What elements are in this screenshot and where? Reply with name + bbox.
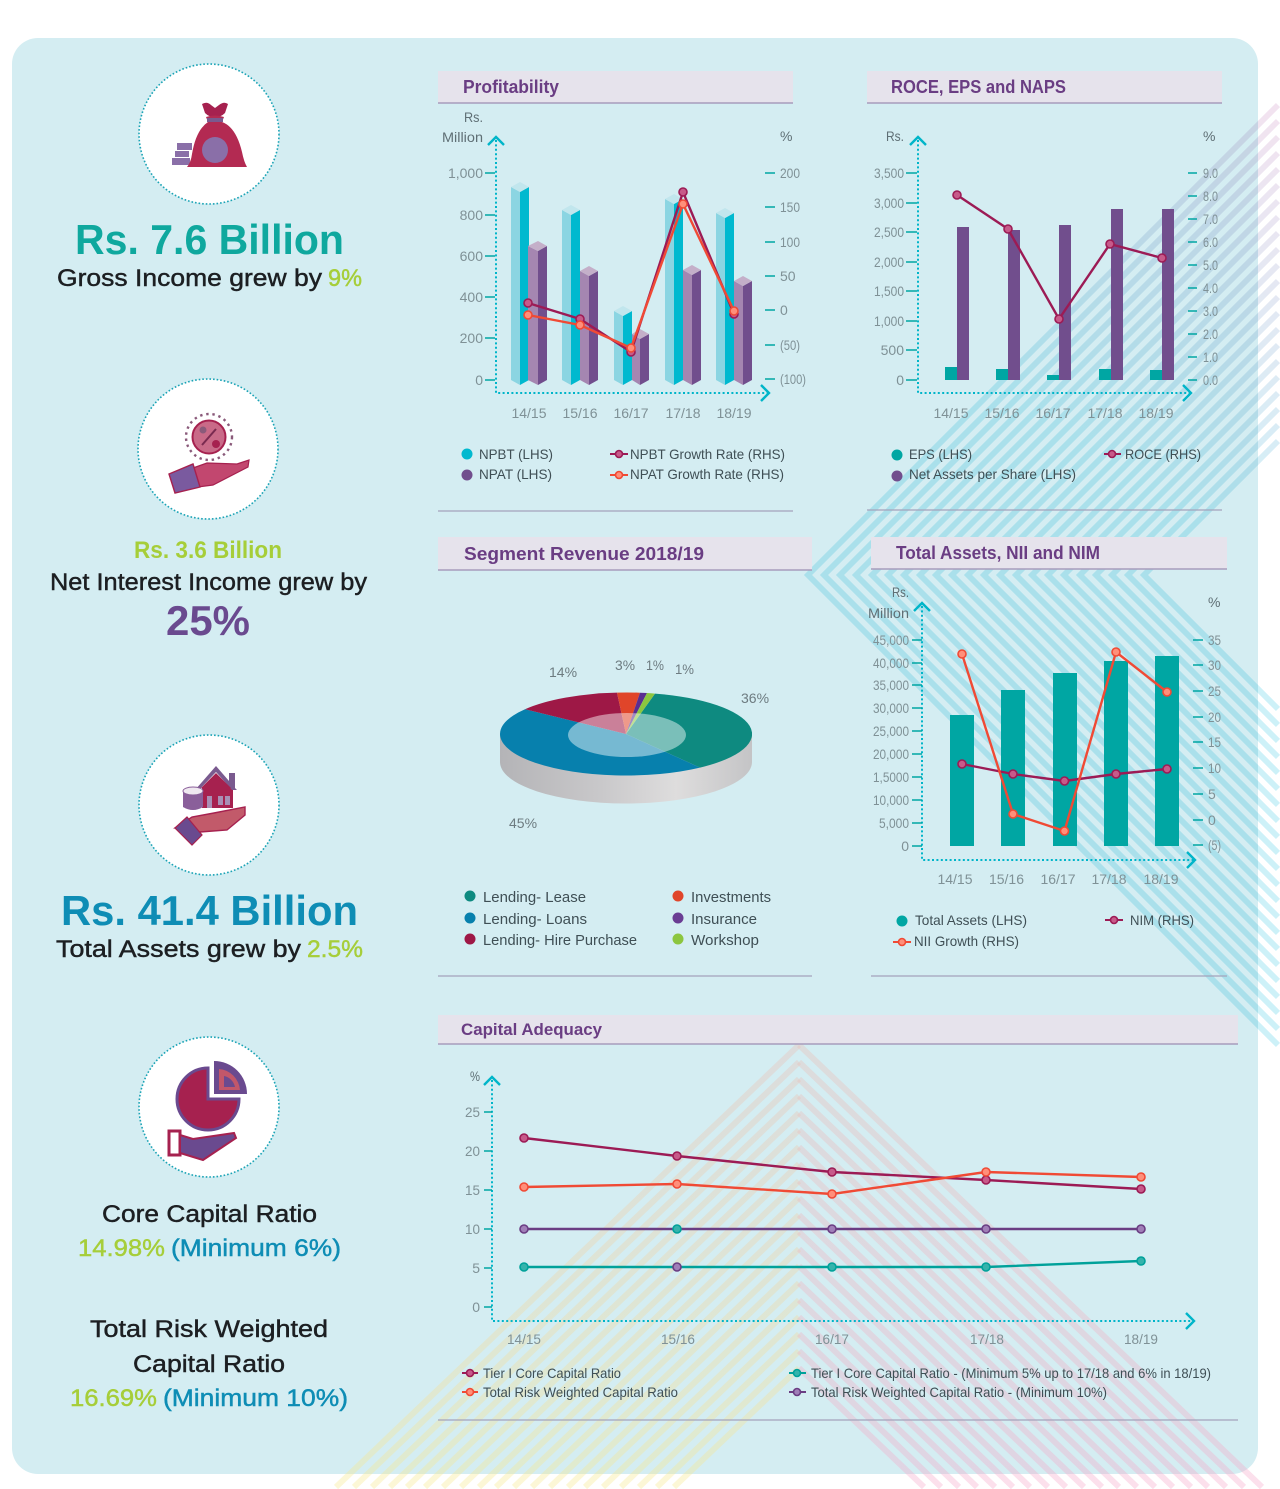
combo chart: 30 [1208,657,1221,673]
line chart: 5 [472,1260,480,1276]
bar chart: EPS and net assets per share: 17/18 [1087,405,1123,421]
legend: Insurance [691,911,757,928]
legend: ROCE (RHS) [1125,446,1201,462]
combo chart: 25 [1208,683,1221,699]
bar chart: EPS and net assets per share: 4.0 [1203,280,1218,296]
bar chart: NPBT and NPAT: (100) [780,371,806,387]
heading [438,71,793,103]
bar chart: NPBT and NPAT: 17/18 [665,405,701,421]
legend [462,446,785,482]
bar chart: NPBT and NPAT: % [780,128,792,144]
heading [867,71,1222,103]
bar chart: EPS and net assets per share: 9.0 [1203,165,1218,181]
combo chart: 0 [1208,812,1216,828]
panel: total assets, NII and NIM [868,537,1227,976]
combo chart: 40,000 [873,655,909,671]
total risk weighted capital ratio: 16.69% [70,1385,157,1412]
bar chart: EPS and net assets per share: 0 [896,372,904,388]
bar chart: EPS and net assets per share: 1.0 [1203,349,1218,365]
bar chart: EPS and net assets per share: 7.0 [1203,211,1218,227]
NII growth line [958,648,1171,835]
pie percentage labels [509,657,769,831]
panel: net interest income highlight [50,379,367,644]
bar chart: EPS and net assets per share: 1,500 [874,283,904,299]
combo chart: 5 [1208,786,1216,802]
legend: NII Growth (RHS) [914,933,1019,949]
pie percentage labels: 14% [549,664,577,680]
legend: Lending- Loans [483,911,587,928]
line chart: 20 [465,1143,480,1159]
legend: Lending- Hire Purchase [483,932,637,949]
heading: Segment Revenue 2018/19 [464,544,704,564]
pie percentage labels: 3% [615,657,635,673]
legend: Workshop [691,932,759,949]
bar chart: NPBT and NPAT: 18/19 [716,405,752,421]
bar chart: EPS and net assets per share: 14/15 [933,405,969,421]
combo chart: 15/16 [989,871,1024,887]
bar chart: EPS and net assets per share: 2.0 [1203,326,1218,342]
tier I core capital ratio line [520,1134,1145,1193]
combo chart: 35,000 [873,677,909,693]
minimum total risk weighted ratio line [520,1225,1145,1233]
pie percentage labels: 45% [509,815,537,831]
line chart: 25 [465,1104,480,1120]
bar chart: NPBT and NPAT: Million [442,129,483,145]
combo chart: 0 [901,838,909,854]
bar chart: EPS and net assets per share: 16/17 [1035,405,1071,421]
bar chart: EPS and net assets per share: 15/16 [984,405,1020,421]
line chart: 15/16 [661,1331,695,1347]
heading: Capital Adequacy [461,1020,603,1039]
pie percentage labels: 1% [675,661,694,677]
total risk weighted capital ratio: Capital Ratio [133,1351,285,1378]
combo chart: 35 [1208,632,1221,648]
bar chart: NPBT and NPAT: 800 [460,207,483,223]
total risk weighted capital ratio [70,1316,348,1412]
bar chart: EPS and net assets per share: 1,000 [874,313,904,329]
legend [893,912,1194,949]
pie percentage labels: 1% [646,657,664,673]
heading: Total Assets, NII and NIM [896,543,1100,563]
combo chart: 10,000 [873,792,909,808]
ROCE line [953,191,1166,323]
EPS bars [945,367,1162,380]
line chart [465,1068,1194,1347]
line chart: 15 [465,1182,480,1198]
bar chart: EPS and net assets per share: 5.0 [1203,257,1218,273]
legend [892,446,1201,482]
legend: NIM (RHS) [1130,912,1194,928]
bar chart: NPBT and NPAT: 100 [780,234,800,250]
combo chart: 15 [1208,734,1221,750]
bar chart: EPS and net assets per share: 3.0 [1203,303,1218,319]
core capital ratio [78,1201,341,1262]
legend: NPBT Growth Rate (RHS) [630,446,785,462]
pie percentage labels: 36% [741,690,769,706]
heading [438,537,812,570]
total risk weighted capital ratio: (Minimum 10%) [163,1385,348,1412]
NIM line [958,760,1171,785]
heading [871,537,1227,569]
panel: total assets highlight [56,735,363,963]
bar chart: EPS and net assets per share: % [1203,128,1215,144]
stat percentage: 25% [166,597,250,644]
bar chart: NPBT and NPAT: (50) [780,337,800,353]
combo chart: 16/17 [1040,871,1076,887]
combo chart: 20 [1208,709,1221,725]
line chart: 14/15 [507,1331,541,1347]
heading: Profitability [463,77,559,97]
combo chart: Million [868,605,909,621]
bar chart: EPS and net assets per share: 8.0 [1203,188,1218,204]
legend: NPBT (LHS) [479,446,553,462]
bar chart: EPS and net assets per share: 2,500 [874,224,904,240]
bar chart: EPS and net assets per share: 500 [881,342,904,358]
bar chart: NPBT and NPAT: 1,000 [448,165,483,181]
legend: Tier I Core Capital Ratio [483,1365,621,1381]
bar chart: EPS and net assets per share [874,128,1218,421]
bar chart: NPBT and NPAT: 0 [475,372,483,388]
bar chart: EPS and net assets per share: Rs. [886,128,904,144]
legend: EPS (LHS) [909,446,972,462]
icon: money bag [139,64,279,204]
heading [438,1015,1238,1044]
combo chart: (5) [1208,837,1221,853]
combo chart: 18/19 [1143,871,1179,887]
bar chart: NPBT and NPAT: 14/15 [511,405,547,421]
stat caption: 2.5% [307,936,363,963]
bar chart: NPBT and NPAT: 600 [460,248,483,264]
minimum tier I ratio line [520,1257,1145,1271]
legend: Investments [691,889,771,906]
legend: NPAT Growth Rate (RHS) [630,466,784,482]
line chart: % [470,1068,480,1084]
total risk weighted capital ratio line [520,1168,1145,1198]
stat caption: Gross Income grew by [57,265,322,292]
combo chart [868,584,1221,887]
combo chart: 20,000 [873,746,909,762]
legend: Total Risk Weighted Capital Ratio [483,1384,678,1400]
combo chart: Rs. [892,584,909,600]
combo chart: 10 [1208,760,1221,776]
bar chart: EPS and net assets per share: 18/19 [1138,405,1174,421]
NPAT bars [528,241,752,385]
stat caption: Net Interest Income grew by [50,569,367,596]
stat caption: 9% [328,265,362,292]
legend: Total Assets (LHS) [915,912,1027,928]
NPBT bars [511,182,734,385]
bar chart: EPS and net assets per share: 3,000 [874,195,904,211]
total assets bars [950,656,1179,846]
icon: hand with percent coin [138,379,278,519]
combo chart: % [1208,594,1220,610]
stat value: Rs. 3.6 Billion [134,537,282,564]
net assets per share bars [957,209,1174,380]
legend: Lending- Lease [483,889,586,906]
combo chart: 25,000 [873,723,909,739]
panel: ROCE, EPS and NAPS [867,71,1222,510]
core capital ratio: 14.98% [78,1235,165,1262]
bar chart: NPBT and NPAT: 150 [780,199,800,215]
bar chart: NPBT and NPAT [442,109,806,421]
bar chart: EPS and net assets per share: 2,000 [874,254,904,270]
panel: segment revenue [438,537,812,976]
legend [462,1365,1211,1400]
heading: ROCE, EPS and NAPS [891,77,1066,97]
bar chart: NPBT and NPAT: 15/16 [562,405,598,421]
bar chart: NPBT and NPAT: 16/17 [613,405,649,421]
panel: gross income highlight [57,64,362,292]
combo chart: 45,000 [873,632,909,648]
core capital ratio: Core Capital Ratio [102,1201,317,1228]
combo chart: 30,000 [873,700,909,716]
bar chart: EPS and net assets per share: 3,500 [874,165,904,181]
line chart: 16/17 [815,1331,849,1347]
stat value: Rs. 7.6 Billion [75,216,344,263]
bar chart: EPS and net assets per share: 6.0 [1203,234,1218,250]
combo chart: 14/15 [937,871,973,887]
pie chart [500,692,752,803]
legend: Net Assets per Share (LHS) [909,466,1076,482]
bar chart: NPBT and NPAT: 400 [460,289,483,305]
icon: hand with house [139,735,279,875]
total risk weighted capital ratio: Total Risk Weighted [90,1316,328,1343]
legend: NPAT (LHS) [479,466,552,482]
line chart: 17/18 [970,1331,1004,1347]
legend [464,889,771,949]
line chart: 0 [472,1299,480,1315]
legend: Total Risk Weighted Capital Ratio - (Minimum 10%) [811,1384,1107,1400]
NPBT growth line [524,188,738,356]
line chart: 18/19 [1124,1331,1158,1347]
panel: profitability [438,71,806,511]
bar chart: NPBT and NPAT: 50 [780,268,796,284]
icon: hand with pie [139,1037,279,1177]
stat value: Rs. 41.4 Billion [61,887,358,934]
combo chart: 17/18 [1091,871,1127,887]
combo chart: 1,5000 [873,769,909,785]
panel: capital adequacy [438,1015,1238,1420]
line chart: 10 [465,1221,480,1237]
core capital ratio: (Minimum 6%) [171,1235,341,1262]
NPAT growth line [524,200,738,352]
bar chart: EPS and net assets per share: 0.0 [1203,372,1218,388]
panel: capital ratios highlight [70,1037,348,1412]
bar chart: NPBT and NPAT: Rs. [464,109,483,125]
combo chart: 5,000 [879,815,909,831]
bar chart: NPBT and NPAT: 200 [780,165,800,181]
bar chart: NPBT and NPAT: 0 [780,302,788,318]
bar chart: NPBT and NPAT: 200 [460,330,483,346]
legend: Tier I Core Capital Ratio - (Minimum 5% up to 17/18 and 6% in 18/19) [811,1365,1211,1381]
stat caption: Total Assets grew by [56,936,301,963]
